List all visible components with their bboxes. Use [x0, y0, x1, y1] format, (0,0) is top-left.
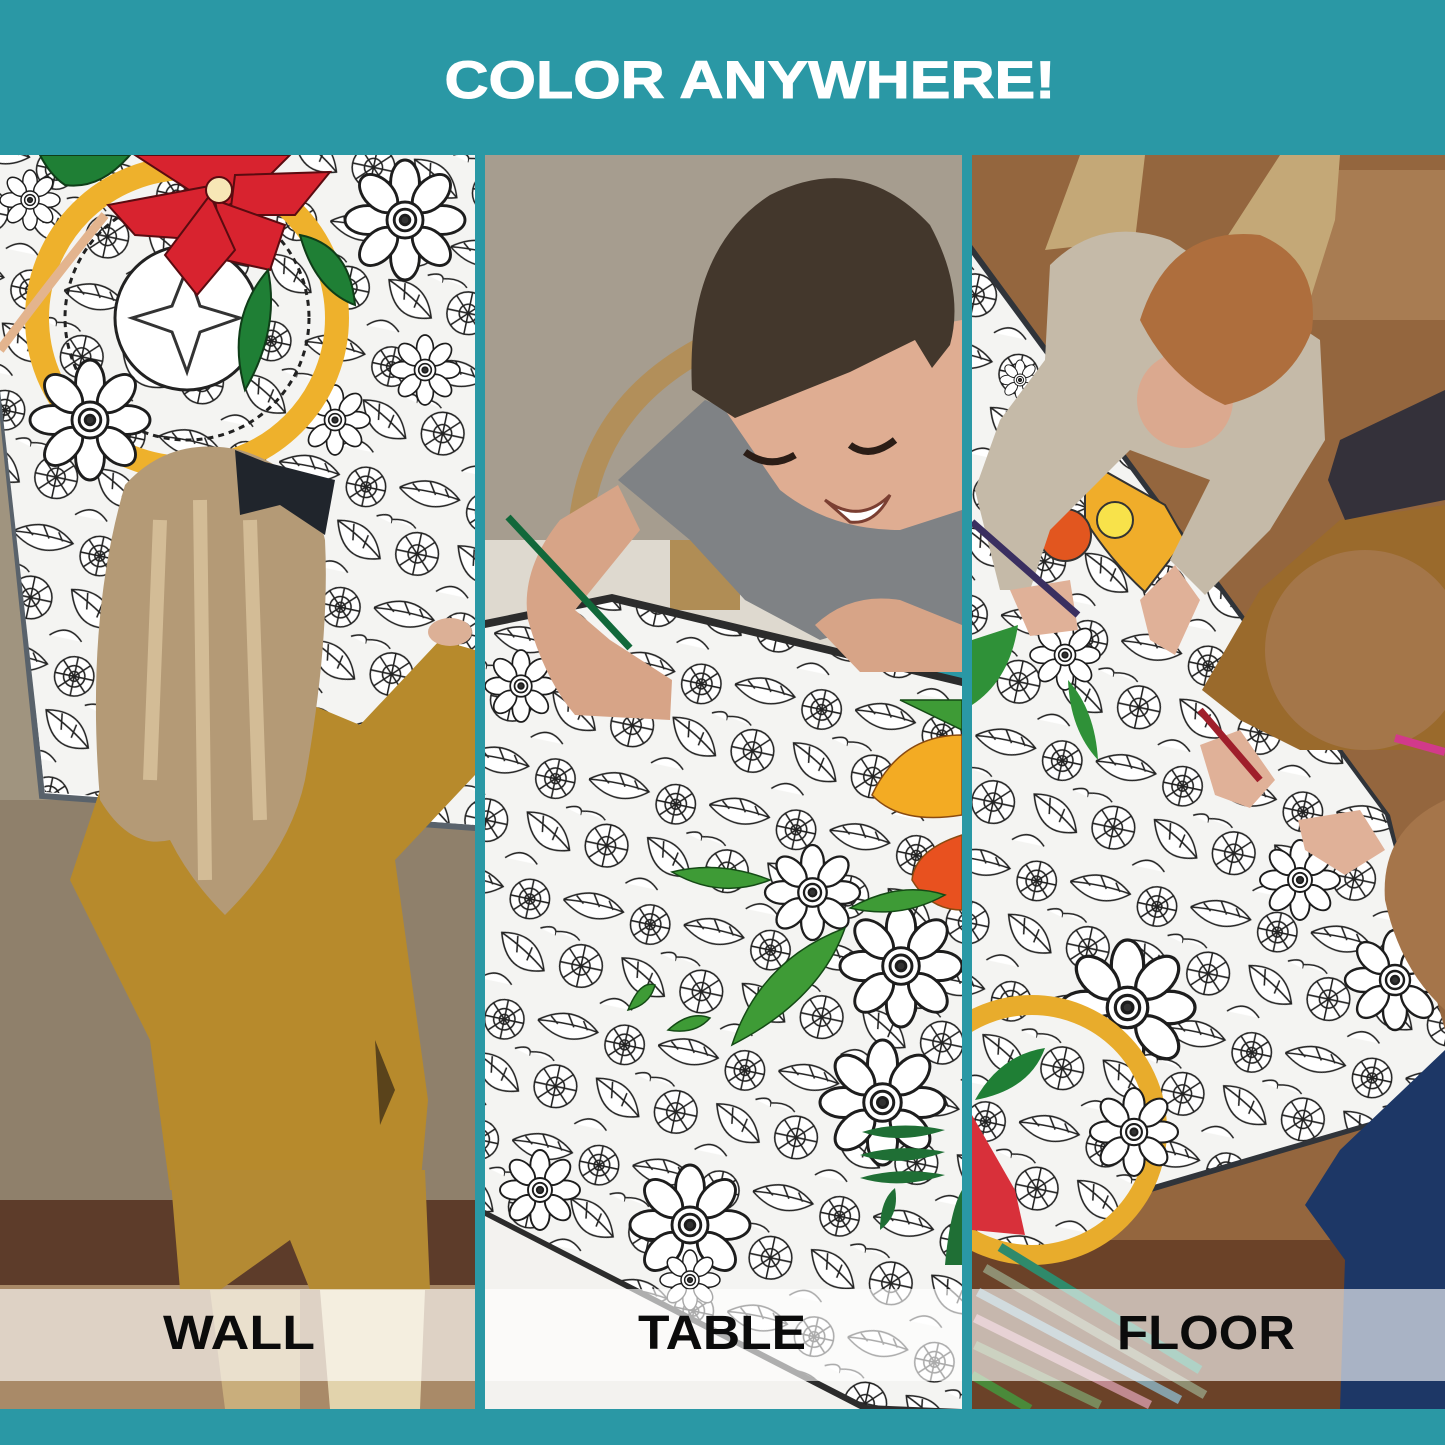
child one hands [1010, 565, 1200, 655]
table surface [485, 1216, 860, 1409]
gold ring flower [30, 360, 150, 480]
gold ring [37, 168, 337, 468]
child two [1200, 505, 1445, 875]
floor poster [972, 245, 1445, 1265]
floor poster gold ring [972, 995, 1167, 1265]
panel: table [485, 155, 962, 1409]
floor poster coloured flower [1085, 460, 1185, 592]
girl hair [96, 447, 326, 915]
floor poster leaves [972, 625, 1018, 705]
child one legs [1045, 155, 1340, 300]
chair [580, 350, 700, 530]
dark knee [1328, 390, 1445, 520]
child one face [1137, 352, 1233, 448]
child one sweater [975, 232, 1325, 595]
markers [972, 1247, 1205, 1409]
boy face [725, 320, 962, 530]
boy eyes [745, 440, 895, 462]
red flower [108, 155, 330, 295]
label: floor [972, 1289, 1445, 1381]
label: table [485, 1289, 962, 1381]
child one hair [1140, 234, 1313, 405]
boy smile [825, 495, 890, 522]
table poster [485, 594, 962, 1409]
label: floor: FLOOR [1117, 1307, 1295, 1360]
table poster coloured flowers [872, 735, 962, 910]
green leaves [40, 155, 355, 390]
panel: floor [972, 155, 1445, 1409]
panel: wall [0, 155, 475, 1410]
girl outfit [70, 640, 475, 1409]
boy arms [527, 485, 962, 720]
title: COLOR ANYWHERE! [444, 51, 1056, 110]
girl hair bow [235, 450, 335, 535]
table poster leaves [628, 700, 962, 1045]
wall poster [0, 155, 475, 828]
table poster fern [860, 1125, 962, 1265]
green pencil [508, 517, 630, 648]
label: table: TABLE [638, 1307, 806, 1360]
label: wall: WALL [163, 1307, 315, 1360]
blue sleeve [1305, 1050, 1445, 1409]
boy hair [691, 178, 954, 418]
girl hand [428, 618, 472, 646]
label: wall [0, 1289, 475, 1381]
child pen [972, 522, 1078, 615]
boy shirt [618, 400, 962, 640]
child three [1385, 800, 1445, 1010]
